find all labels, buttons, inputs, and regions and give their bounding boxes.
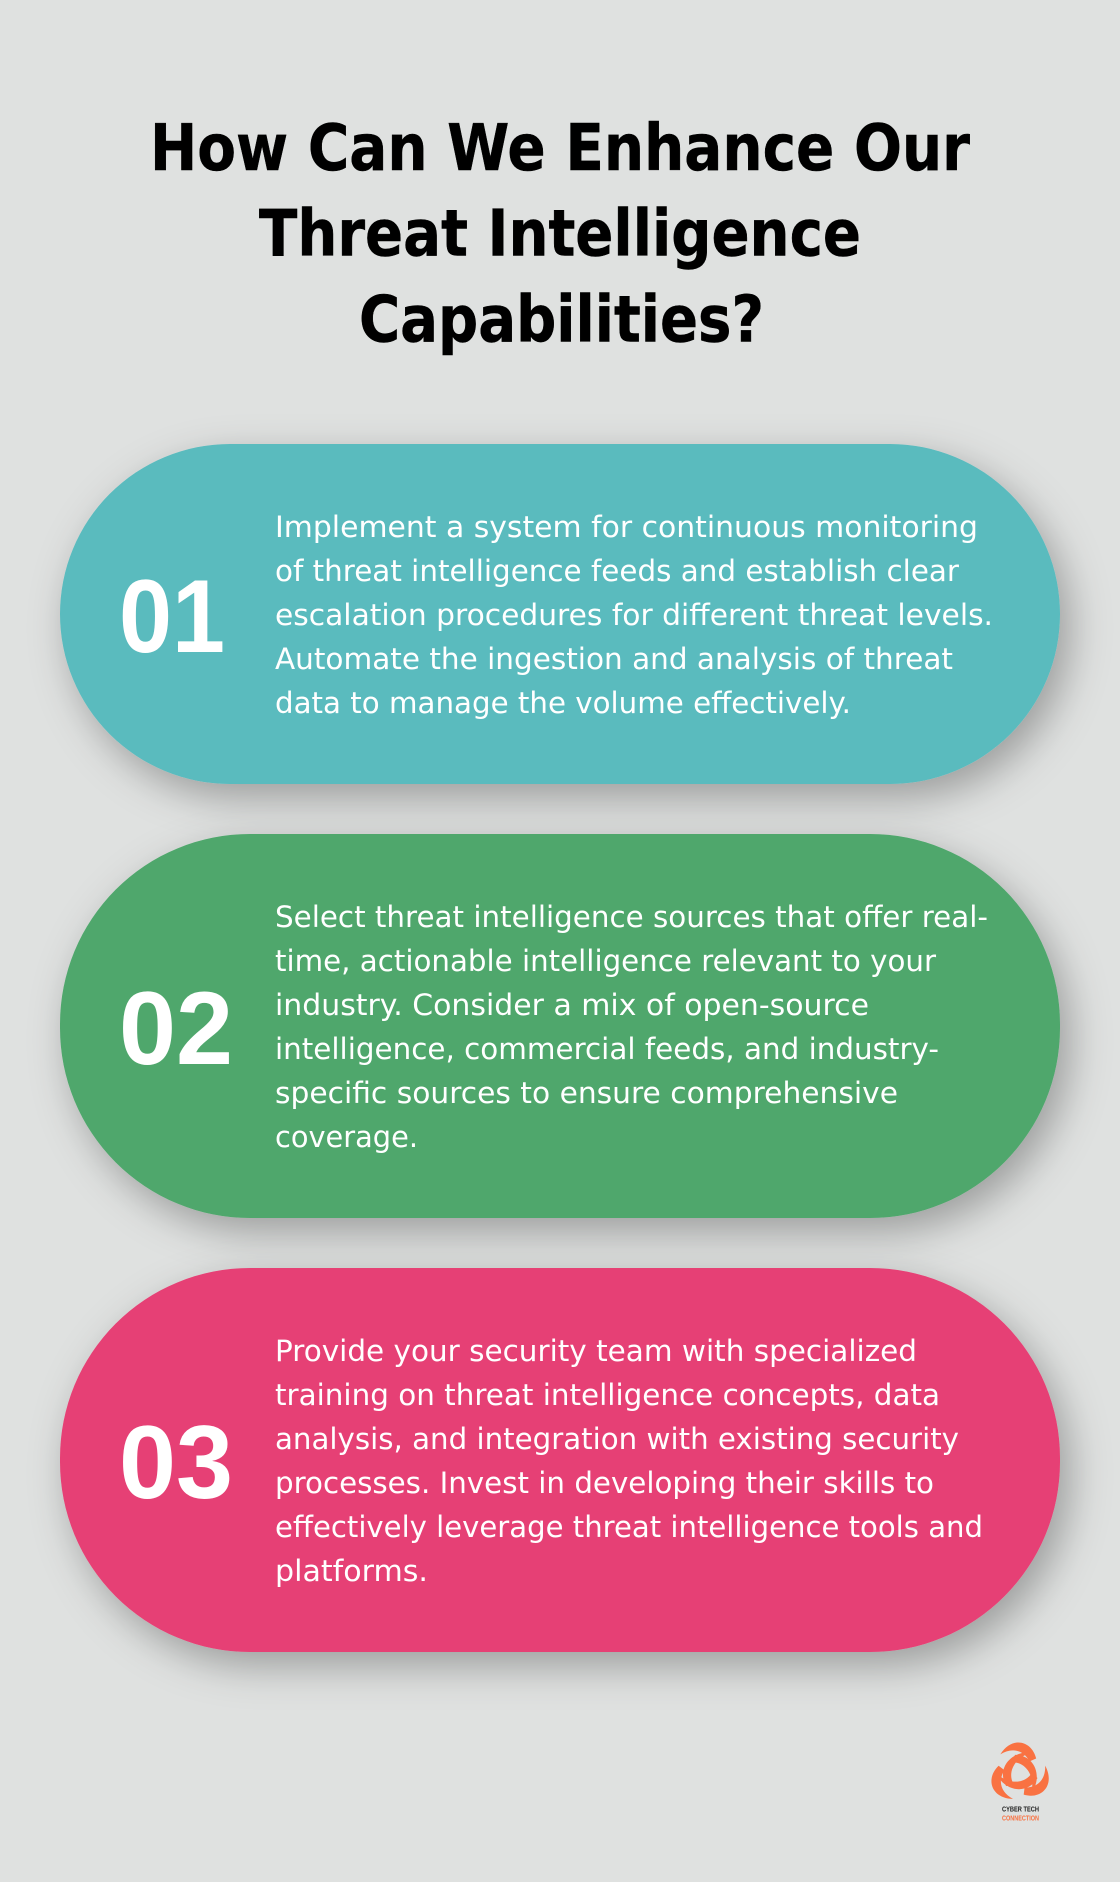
number 02: 02 <box>119 971 233 1087</box>
text block: step 02 description: specific sources to ensure comprehensive <box>275 1076 898 1110</box>
icon: orange swirl <box>988 1736 1056 1801</box>
text block: step 01 description <box>275 510 993 720</box>
text block: step 03 description: effectively leverage threat intelligence tools and <box>275 1510 983 1544</box>
title: Threat Intelligence <box>259 198 861 272</box>
text block: step 03 description: Provide your security team with specialized <box>275 1334 917 1368</box>
panel: step 01 <box>60 444 1060 784</box>
text block: step 03 description: analysis, and integration with existing security <box>275 1422 959 1456</box>
text block: step 02 description: time, actionable intelligence relevant to your <box>275 944 936 978</box>
text block: step 02 description: Select threat intelligence sources that offer real- <box>275 900 988 934</box>
panel background: pink pill <box>60 1268 1060 1652</box>
text block: step 03 description: training on threat intelligence concepts, data <box>275 1378 940 1412</box>
text block: step 03 description: processes. Invest in developing their skills to <box>275 1466 934 1500</box>
text block: step 03 description <box>275 1334 983 1588</box>
text block: step 02 description <box>275 900 988 1154</box>
text block: step 01 description: escalation procedures for different threat levels. <box>275 598 993 632</box>
text block: step 03 description: platforms. <box>275 1554 428 1588</box>
logo wordmark: CYBER TECH <box>1002 1804 1039 1814</box>
title: How Can We Enhance Our <box>150 112 970 186</box>
text block: step 01 description: Implement a system for continuous monitoring <box>275 510 978 544</box>
panel background: green pill <box>60 834 1060 1218</box>
title: Capabilities? <box>359 284 764 358</box>
panel background: teal pill <box>60 444 1060 784</box>
text block: step 02 description: intelligence, commercial feeds, and industry- <box>275 1032 939 1066</box>
number 03: 03 <box>119 1405 233 1521</box>
logo: Cyber Tech Connection <box>988 1736 1056 1822</box>
logo wordmark <box>1002 1804 1039 1822</box>
panel: step 03 <box>60 1268 1060 1652</box>
text block: step 01 description: Automate the ingestion and analysis of threat <box>275 642 953 676</box>
text block: step 01 description: data to manage the volume effectively. <box>275 686 851 720</box>
logo wordmark: CONNECTION <box>1002 1814 1039 1822</box>
panel: step 02 <box>60 834 1060 1218</box>
title <box>150 112 970 358</box>
text block: step 02 description: coverage. <box>275 1120 418 1154</box>
text block: step 01 description: of threat intelligence feeds and establish clear <box>275 554 959 588</box>
number 01: 01 <box>119 559 225 675</box>
text block: step 02 description: industry. Consider a mix of open-source <box>275 988 869 1022</box>
